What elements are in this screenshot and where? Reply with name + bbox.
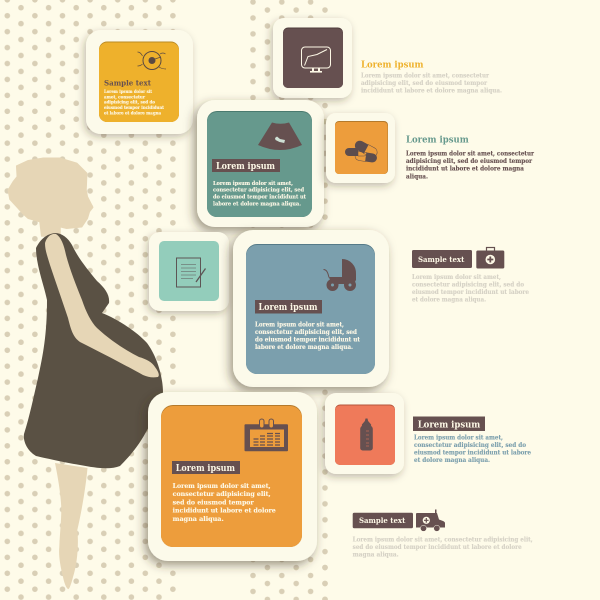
- text block: bottle caption: Lorem ipsum dolor sit amet,: [414, 434, 503, 442]
- label: lorem ipsum: Lorem ipsum: [176, 464, 235, 474]
- label: lorem ipsum: [255, 300, 322, 314]
- heading: sample text: Sample text: [104, 78, 152, 88]
- text block: bottle caption: eiusmod tempor incididunt ut labore: [414, 450, 532, 456]
- icon: ultrasound scan: [258, 122, 302, 150]
- text block: Lorem ipsum dolor sit amet,: [173, 482, 271, 490]
- text block: medical kit caption: et dolore magna aliqua.: [412, 296, 486, 304]
- heading: monitor caption: Lorem ipsum: [361, 60, 424, 70]
- label: sample text: [353, 513, 413, 528]
- text block: magna aliqua.: [173, 515, 224, 523]
- panel: monitor card: [273, 18, 352, 98]
- panel: red bottle card: [325, 393, 404, 474]
- text block: et labore et dolore magna: [104, 110, 161, 116]
- text block: monitor caption: incididunt ut labore et dolore magna aliqua.: [361, 88, 502, 94]
- text: medical kit caption: [412, 248, 530, 304]
- heading: pills caption: Lorem ipsum: [406, 136, 469, 146]
- text block: labore et dolore magna aliqua.: [213, 201, 301, 207]
- text block: Lorem ipsum dolor sit: [104, 89, 152, 95]
- text block: sed do eiusmod tempor: [173, 498, 255, 506]
- text block: consectetur adipisicing elit,: [173, 490, 271, 498]
- text block: bottle caption: [414, 434, 532, 464]
- label: lorem ipsum: Lorem ipsum: [418, 420, 480, 430]
- text block: consectetur adipisicing elit, sed: [255, 329, 357, 336]
- text block: [213, 181, 307, 207]
- text: monitor caption: [361, 60, 502, 94]
- icon: baby bottle: [360, 418, 373, 450]
- panel: teal ultrasound card: [197, 100, 324, 227]
- text block: Lorem ipsum dolor sit amet,: [255, 322, 344, 328]
- text block: do eiusmod tempor incididunt ut: [213, 194, 307, 200]
- text block: medical kit caption: Lorem ipsum dolor sit amet,: [412, 274, 501, 281]
- text block: bottle caption: et dolore magna aliqua.: [414, 457, 490, 464]
- text block: adipisicing elit, sed do: [104, 100, 155, 106]
- panel: pills card: [326, 113, 395, 183]
- panel: yellow sample card: [86, 30, 193, 134]
- text block: medical kit caption: consectetur adipisicing elit, sed do: [412, 282, 524, 288]
- text block: ambulance caption: magna aliqua.: [353, 552, 399, 558]
- text block: [104, 89, 164, 116]
- icon: stroller: [324, 259, 356, 291]
- icon: calendar: [244, 419, 288, 451]
- icon: medical kit: [476, 248, 504, 268]
- text block: monitor caption: [361, 72, 502, 94]
- text: bottle caption: [413, 416, 532, 464]
- text block: pills caption: adipisicing elit, sed do eiusmod tempor: [406, 158, 532, 165]
- woman dress: [24, 233, 163, 468]
- text block: labore et dolore magna aliqua.: [255, 344, 353, 351]
- text block: monitor caption: Lorem ipsum dolor sit amet, consectetur: [361, 72, 489, 80]
- text block: pills caption: incididunt ut labore et dolore magna: [406, 166, 525, 172]
- text block: pills caption: [406, 150, 534, 180]
- text block: pills caption: Lorem ipsum dolor sit amet, consectetur: [406, 150, 534, 158]
- icon: pills: [345, 139, 379, 163]
- text block: amet, consectetur: [104, 94, 146, 100]
- panel: document card: [149, 232, 229, 311]
- text block: pills caption: aliqua.: [406, 174, 428, 180]
- text block: ambulance caption: Lorem ipsum dolor sit amet, consectetur adipisicing elit,: [353, 536, 533, 544]
- illustration: pregnant woman silhouette: [8, 158, 163, 589]
- text block: incididunt ut labore et dolore: [173, 507, 276, 515]
- text block: medical kit caption: [412, 274, 530, 304]
- panel: orange calendar card: [148, 392, 317, 561]
- text block: medical kit caption: eiusmod tempor incididunt ut labore: [412, 289, 530, 296]
- text block: ambulance caption: [353, 536, 533, 558]
- woman arm: [45, 234, 159, 377]
- text block: do eiusmod tempor incididunt ut: [255, 336, 360, 344]
- text block: consectetur adipisicing elit, sed: [213, 188, 304, 194]
- icon: monitor chart: [302, 47, 330, 72]
- icon: ambulance: [416, 510, 445, 531]
- label: lorem ipsum: [172, 461, 240, 474]
- woman head and hair: [8, 158, 93, 236]
- text block: monitor caption: adipisicing elit, sed do eiusmod tempor: [361, 80, 487, 87]
- text: pills caption: [406, 136, 534, 180]
- text block: eiusmod tempor incididunt: [104, 105, 164, 111]
- label: lorem ipsum: Lorem ipsum: [216, 162, 275, 172]
- icon: document and pen: [176, 258, 206, 287]
- text block: Lorem ipsum dolor sit amet,: [213, 181, 293, 187]
- panel: blue stroller card: [233, 230, 389, 387]
- label: lorem ipsum: Lorem ipsum: [258, 303, 318, 313]
- icon: fetus target: [138, 52, 166, 70]
- text block: ambulance caption: sed do eiusmod tempor incididunt ut labore et dolore: [353, 544, 522, 551]
- text block: [173, 482, 276, 523]
- text block: [255, 322, 360, 351]
- woman leg: [55, 463, 88, 589]
- label: sample text: Sample text: [359, 516, 406, 525]
- text: ambulance caption: [353, 510, 533, 558]
- label: sample text: Sample text: [418, 255, 465, 264]
- text block: bottle caption: consectetur adipisicing elit, sed do: [414, 442, 526, 449]
